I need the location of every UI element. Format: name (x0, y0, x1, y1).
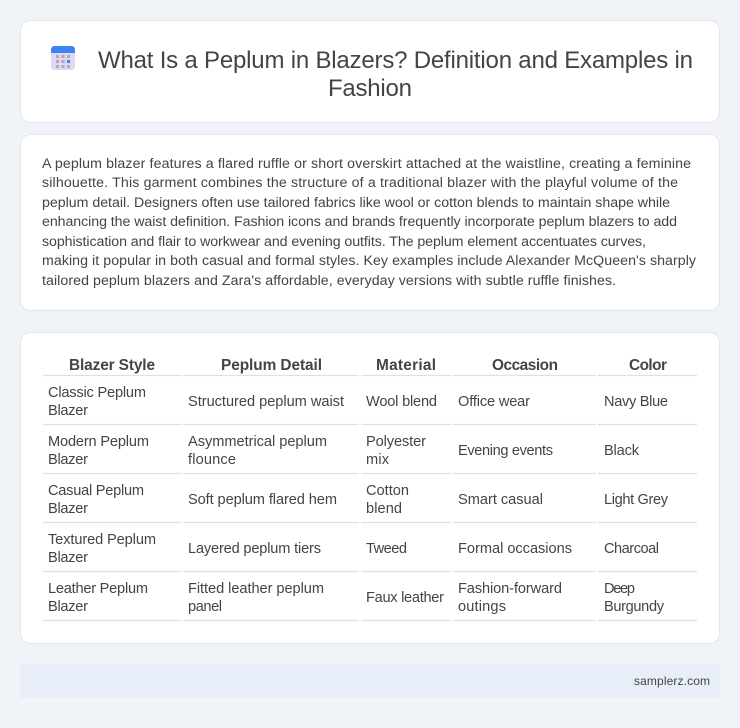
footer: samplerz.com (634, 674, 710, 688)
table row: casual (48, 483, 669, 517)
table row: modern: Polyester (366, 434, 426, 450)
table row: leather: Deep (604, 581, 635, 597)
footer (20, 664, 720, 698)
text block: description: tailored peplum blazers and Zara's affordable, everyday versions with subtle ruffle finishes. (42, 273, 616, 289)
table header: Color (629, 357, 667, 374)
table row: textured: Blazer (48, 550, 88, 566)
title (98, 47, 693, 102)
table row: casual: blend (366, 501, 402, 517)
text block: description: A peplum blazer features a flared ruffle or short overskirt attached at the waistline, creating a feminine (42, 156, 691, 172)
table row: modern (48, 434, 640, 468)
text block: description (42, 156, 697, 289)
table row: leather: Fitted leather peplum (188, 581, 324, 597)
table row: textured: Layered peplum tiers (188, 541, 321, 557)
table row: casual: Casual Peplum (48, 483, 144, 499)
table row: leather: Blazer (48, 599, 88, 615)
table row: textured: Textured Peplum (48, 532, 156, 548)
table row: leather: Leather Peplum (48, 581, 148, 597)
table row: textured: Tweed (366, 541, 407, 557)
table row: classic: Classic Peplum (48, 385, 146, 401)
table row: modern: Modern Peplum (48, 434, 149, 450)
table header: Material (376, 357, 436, 374)
text block: description: sophistication and flair to workwear and evening outfits. The peplum element accentuates curves, (42, 234, 646, 250)
table row: leather: Faux leather (366, 590, 444, 606)
table header: Occasion (492, 357, 558, 374)
table row: leather (48, 581, 665, 615)
table row: modern: Blazer (48, 452, 88, 468)
table row: textured: Formal occasions (458, 541, 572, 557)
table row: leather: outings (458, 599, 506, 615)
text block: description: peplum detail. Designers often use tailored fabrics like wool or cotton blends to maintain shape while (42, 195, 670, 211)
table row: modern: Asymmetrical peplum (188, 434, 327, 450)
table row: classic (48, 385, 668, 419)
table row: textured: Charcoal (604, 541, 659, 557)
table row: casual: Light Grey (604, 492, 669, 508)
title: What Is a Peplum in Blazers? Definition and Examples in (98, 47, 693, 74)
text block: description: making it popular in both casual and formal styles. Key examples include Alexander McQueen's sharply (42, 253, 697, 269)
table row: leather: Fashion-forward (458, 581, 562, 597)
table row: textured (48, 532, 659, 566)
panel: header (20, 20, 720, 122)
icon: calendar (51, 46, 75, 70)
title: Fashion (328, 75, 412, 102)
text block: description: silhouette. This garment combines the structure of a traditional blazer with the playful volume of the (42, 175, 678, 191)
text block: description: enhancing the waist definition. Fashion icons and brands frequently incorporate peplum blazers to add (42, 214, 677, 230)
table row: modern: mix (366, 452, 390, 468)
table row: modern: Black (604, 443, 640, 459)
table header (69, 357, 667, 374)
panel: table (20, 332, 720, 644)
table row: leather: Burgundy (604, 599, 665, 615)
table row: leather: panel (188, 599, 222, 615)
panel: description (20, 134, 720, 310)
table row: classic: Wool blend (366, 394, 437, 410)
table row: classic: Office wear (458, 394, 530, 410)
table row: casual: Soft peplum flared hem (188, 492, 337, 508)
table header: Peplum Detail (221, 357, 322, 374)
table row: casual: Smart casual (458, 492, 543, 508)
table row: classic: Blazer (48, 403, 88, 419)
table row: modern: flounce (188, 452, 236, 468)
table row: casual: Cotton (366, 483, 409, 499)
table row: modern: Evening events (458, 443, 553, 459)
table row: classic: Structured peplum waist (188, 394, 344, 410)
table row: casual: Blazer (48, 501, 88, 517)
table header: Blazer Style (69, 357, 155, 374)
table row: classic: Navy Blue (604, 394, 668, 410)
